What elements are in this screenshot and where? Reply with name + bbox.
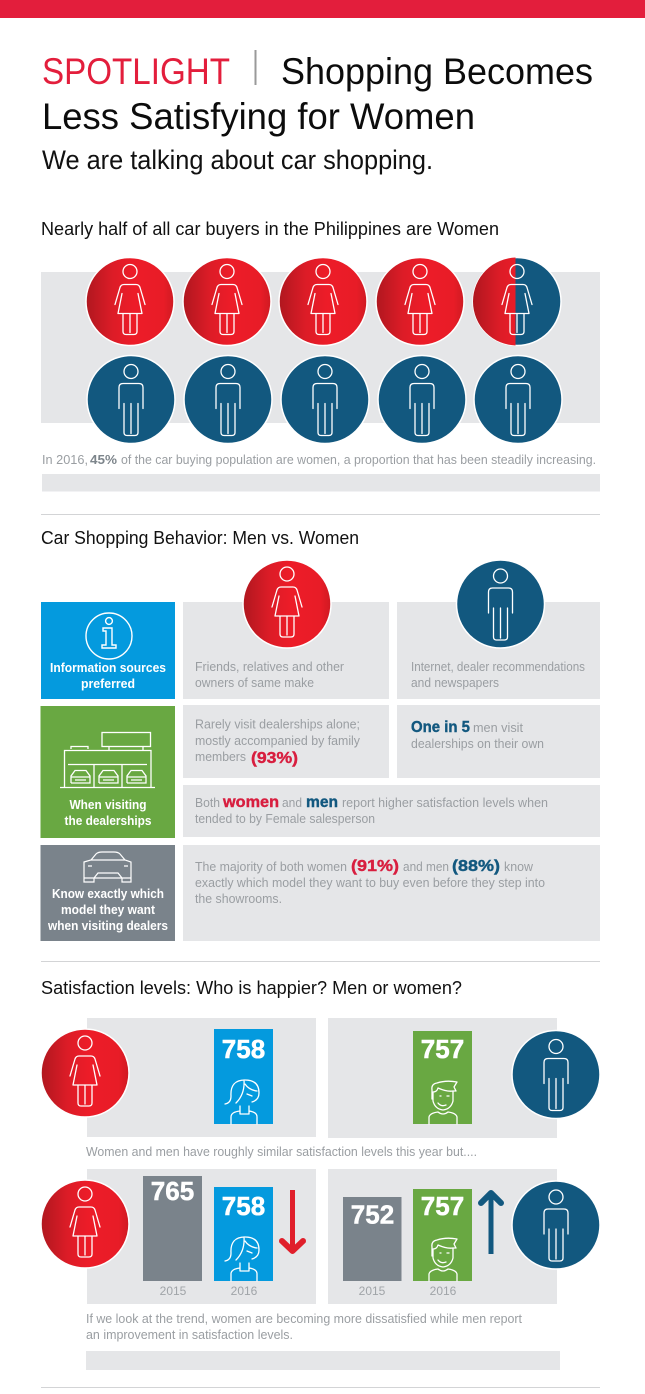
panel: know exactly	[40, 845, 175, 941]
bar: women 2016	[214, 1187, 273, 1298]
title: Shopping Becomes	[281, 51, 593, 92]
caption: 45 percent: 45%	[90, 453, 117, 467]
panel: majority text: (88%)	[452, 858, 500, 875]
bar: men 2016: 757	[421, 1191, 464, 1221]
panel: female salesperson: report higher satisfaction levels when	[342, 796, 548, 810]
bar: men 2015: 2015	[359, 1284, 386, 1298]
top red bar	[0, 0, 645, 18]
panel: know exactly: Know exactly which	[52, 887, 164, 901]
heading: satisfaction: Satisfaction levels: Who is happier? Men or women?	[41, 977, 462, 998]
panel: visiting dealerships	[40, 706, 175, 838]
bar: women 2015	[143, 1176, 202, 1298]
heading: behavior: Car Shopping Behavior: Men vs. Women	[41, 527, 359, 548]
heading: nearly half: Nearly half of all car buyers in the Philippines are Women	[41, 218, 499, 239]
bar: women 2015: 2015	[160, 1284, 187, 1298]
panel: women 2016	[87, 1018, 316, 1137]
men row	[87, 356, 562, 444]
panel: majority text: exactly which model they want to buy even before they step into	[195, 876, 545, 890]
panel: majority text: (91%)	[351, 858, 399, 875]
panel: visiting women: (93%)	[251, 750, 298, 767]
icon: woman	[41, 1029, 129, 1117]
title	[42, 50, 593, 137]
panel: visiting men	[397, 705, 600, 778]
caption: 45 percent: In 2016,	[42, 453, 88, 467]
bar: men 2015	[343, 1197, 402, 1298]
subtitle: We are talking about car shopping.	[42, 145, 433, 175]
bar: women 758	[214, 1029, 273, 1124]
panel: information sources: preferred	[81, 677, 135, 691]
icon: car	[84, 852, 131, 882]
text: similar levels: Women and men have roughly similar satisfaction levels this year but....	[86, 1145, 477, 1159]
caption: 45 percent: of the car buying population are women, a proportion that has been steadily increasing.	[121, 453, 596, 467]
bar: women 2015: 765	[151, 1176, 194, 1206]
panel: information men	[397, 602, 600, 699]
icon: dealership	[60, 732, 155, 788]
panel: female salesperson: men	[306, 794, 338, 811]
panel: visiting women: members	[195, 750, 246, 764]
panel: majority text	[183, 845, 600, 941]
panel: information women	[183, 602, 389, 699]
panel: female salesperson	[183, 785, 600, 837]
panel: visiting men: dealerships on their own	[411, 737, 544, 751]
panel: information men: Internet, dealer recommendations	[411, 660, 585, 674]
panel: information sources	[41, 602, 175, 699]
panel: majority text: The majority of both women	[195, 860, 347, 874]
panel: visiting women	[183, 705, 389, 778]
icon: man	[512, 1030, 600, 1118]
bar: women 2016: 758	[222, 1191, 265, 1221]
panel: female salesperson: tended to by Female salesperson	[195, 812, 375, 826]
panel: visiting women: mostly accompanied by family	[195, 734, 361, 748]
panel: visiting men: One in 5	[411, 719, 470, 736]
icon: woman	[41, 1180, 129, 1268]
icon: info	[86, 613, 132, 659]
panel: men trend	[328, 1169, 557, 1304]
panel: majority text: the showrooms.	[195, 892, 282, 906]
panel: population pictogram	[41, 258, 600, 444]
panel: visiting dealerships: When visiting	[70, 798, 146, 812]
title: SPOTLIGHT	[42, 51, 230, 92]
panel: information women: owners of same make	[195, 676, 314, 690]
arrow: down	[282, 1190, 303, 1251]
panel: men 2016	[328, 1018, 557, 1138]
bar: men 2015: 752	[351, 1200, 394, 1230]
bar: men 2016	[413, 1189, 472, 1298]
panel: female salesperson: women	[222, 794, 279, 811]
panel: female salesperson: and	[282, 796, 302, 810]
bar: women 758: 758	[222, 1034, 265, 1064]
women row	[86, 258, 561, 346]
bar: men 757	[413, 1031, 472, 1124]
icon: man	[512, 1181, 600, 1269]
panel: women trend	[87, 1169, 316, 1304]
panel: visiting dealerships: the dealerships	[64, 814, 152, 828]
text: trend: an improvement in satisfaction levels.	[86, 1328, 293, 1342]
icon: woman	[243, 560, 331, 648]
panel: information men: and newspapers	[411, 676, 499, 690]
title: Less Satisfying for Women	[42, 96, 475, 137]
panel: visiting women: Rarely visit dealerships alone;	[195, 718, 360, 732]
panel: visiting men: men visit	[473, 721, 524, 735]
panel: know exactly: model they want	[61, 903, 156, 917]
arrow: up	[481, 1193, 501, 1254]
panel: majority text: know	[504, 860, 534, 874]
panel: know exactly: when visiting dealers	[47, 919, 168, 933]
panel: information sources: Information sources	[50, 661, 166, 675]
bar: women 2016: 2016	[231, 1284, 258, 1298]
bar: men 757: 757	[421, 1034, 464, 1064]
panel: majority text: and men	[403, 860, 449, 874]
text: trend: If we look at the trend, women are becoming more dissatisfied while men report	[86, 1312, 523, 1326]
icon: man	[456, 560, 544, 648]
panel: female salesperson: Both	[195, 796, 220, 810]
bar: men 2016: 2016	[430, 1284, 457, 1298]
panel: information women: Friends, relatives and other	[195, 660, 344, 674]
text: trend	[86, 1312, 523, 1342]
